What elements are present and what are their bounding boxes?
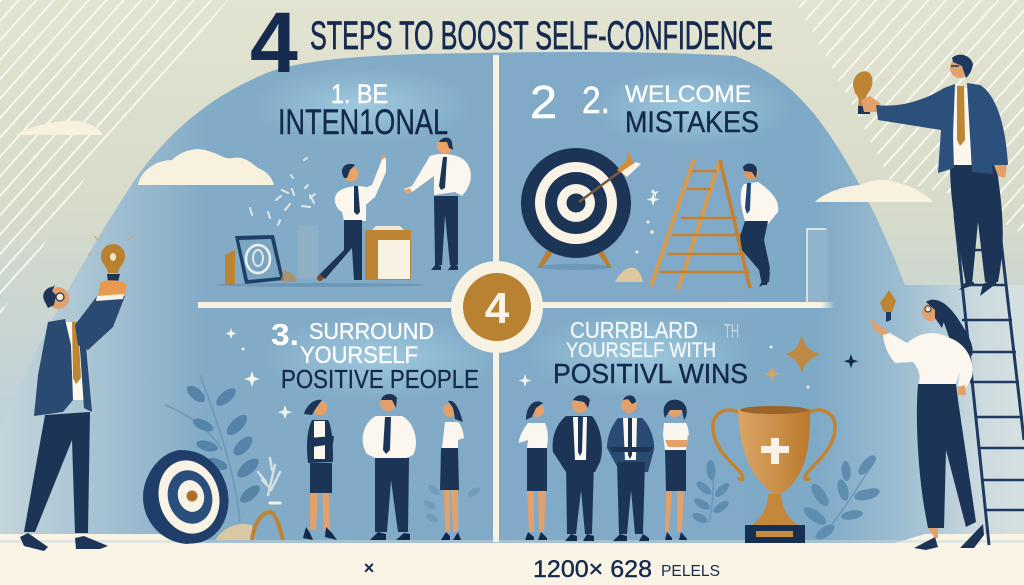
center number badge: 4 (485, 284, 510, 333)
sparkles (518, 334, 858, 388)
cloud: far left (15, 121, 103, 135)
arrow (579, 151, 641, 202)
step 4 heading: YOURSELF WITH (566, 339, 716, 362)
plant (165, 375, 263, 522)
panel: step 3 (137, 317, 482, 553)
man reaching (317, 155, 386, 281)
tablet with target (225, 235, 296, 285)
figure: man on ladder holding trophy (853, 55, 1024, 545)
sparkles (636, 189, 660, 254)
step 1 heading: 1. BE (331, 79, 388, 109)
footer: dimensions label: PELELS (661, 563, 720, 580)
small leaves (422, 483, 482, 525)
small trophy (853, 71, 873, 114)
woman right (663, 400, 689, 540)
footer: x mark: × (364, 558, 374, 578)
box (365, 226, 411, 280)
ladder (955, 215, 1024, 545)
ladder (651, 159, 750, 290)
figure: woman with small trophy (868, 290, 984, 550)
footer: dimensions label (533, 556, 720, 583)
step 2 heading: 2 (530, 76, 557, 128)
step 2 heading (530, 76, 759, 139)
step 4 heading: POSITIVL WINS (553, 358, 748, 389)
pale sprig (258, 458, 280, 503)
small trophy (880, 290, 896, 322)
cloud: step one (138, 149, 274, 185)
step 2 heading: WELCOME (625, 81, 751, 108)
trophy (713, 406, 835, 543)
step 3 heading (271, 317, 479, 394)
man with hand on hip (404, 137, 471, 270)
step 3 heading: POSITIVE PEOPLE (281, 364, 479, 394)
ground shadow (215, 283, 425, 287)
step 2 heading: 2. (582, 80, 610, 122)
step 2 heading: MISTAKES (625, 106, 759, 139)
man in suit left (553, 395, 602, 541)
panel grid dividers (198, 55, 835, 542)
step 4 heading: CURRBLARD (570, 317, 698, 343)
light bulb (88, 236, 133, 282)
step 1 heading (278, 79, 448, 142)
floor band (0, 534, 1024, 585)
rock and wire arch (215, 512, 283, 540)
woman left (519, 401, 548, 540)
scattered leaves (250, 158, 315, 225)
grey block (298, 226, 318, 278)
plant left of trophy (691, 460, 731, 525)
outlined panel (807, 228, 828, 302)
heading glows (252, 67, 790, 400)
woman arms crossed (303, 400, 337, 540)
step 3 heading: YOURSELF (300, 342, 418, 369)
center number badge (451, 261, 543, 353)
panel: step 4 (518, 317, 881, 543)
fallen target (137, 441, 239, 553)
title (250, 0, 773, 91)
step 4 heading: TH (724, 321, 739, 343)
figure: man on left holding bulb (20, 236, 133, 551)
panel: step 2 (521, 76, 828, 302)
plant right of trophy (801, 453, 881, 542)
panel: step 1 (215, 79, 471, 287)
step 1 heading: INTEN1ONAL (278, 103, 448, 142)
man beside ladder (740, 164, 778, 287)
man centre (363, 394, 416, 540)
step 3 heading: SURROUND (309, 318, 434, 344)
man in suit right (607, 395, 654, 541)
cloud: right (815, 180, 933, 202)
sparkles (226, 328, 292, 419)
title: STEPS TO BOOST SELF-CONFIDENCE (310, 14, 773, 58)
woman right (440, 401, 464, 540)
step 3 heading: 3. (271, 317, 299, 352)
step 4 heading (553, 317, 748, 389)
footer: dimensions label: 1200× 628 (533, 556, 652, 583)
rock (615, 268, 643, 282)
archery target (521, 148, 631, 270)
